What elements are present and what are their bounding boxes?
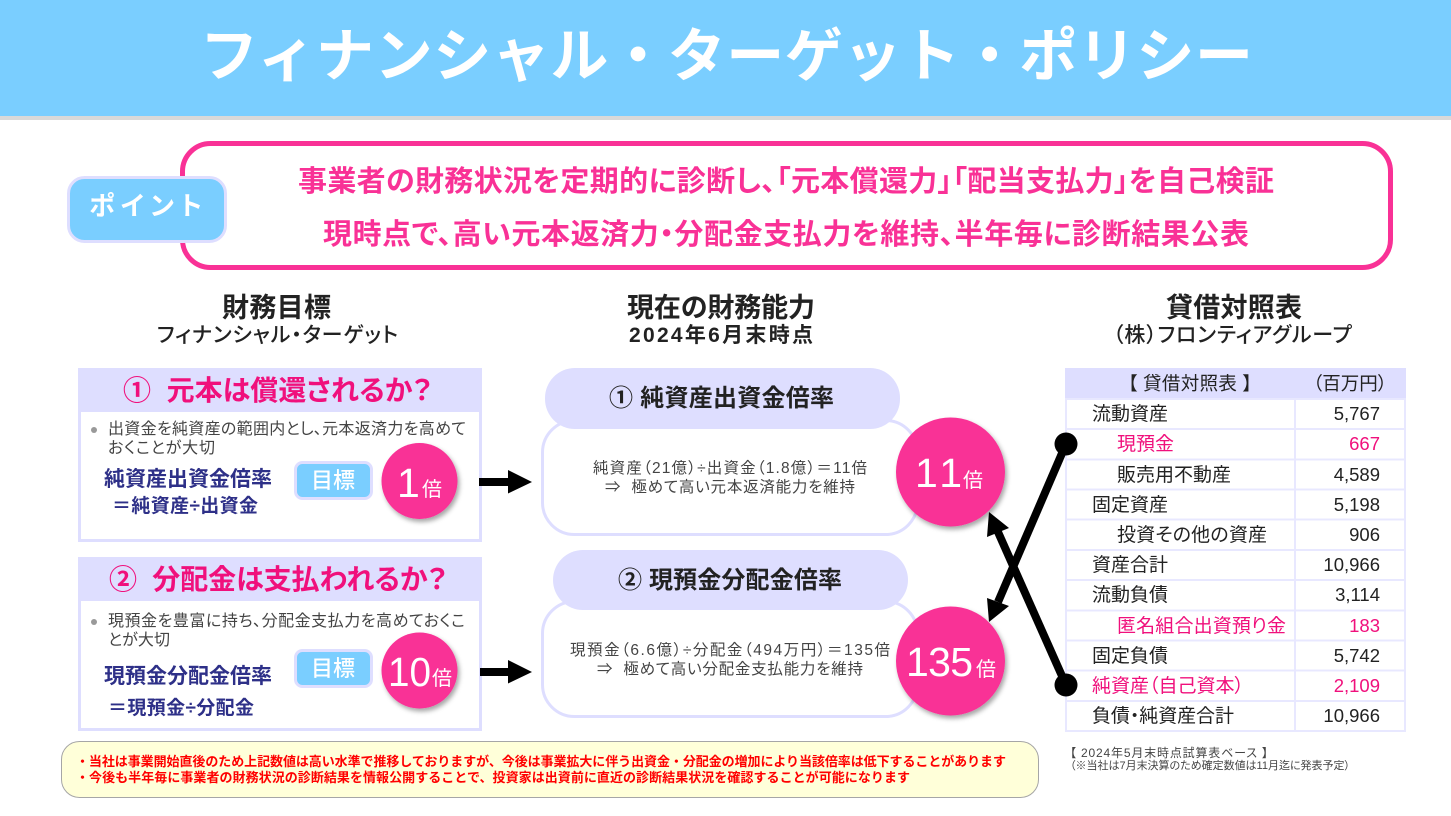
panel: current ratio 1: ⇒ 極めて高い元本返済能力を維持 [605,478,855,496]
panel: current ratio 1 [542,368,1005,534]
panel: current ratio 1: 純資産（21億）÷出資金（1.8億）＝11倍 [593,459,867,477]
balance sheet table: 5,742 [1334,645,1380,666]
panel: key point: ポイント [89,191,202,221]
panel: target 1: 倍 [422,478,442,501]
balance sheet table: 667 [1349,433,1380,454]
balance sheet table: 183 [1349,615,1380,636]
panel: target 2: 現預金分配金倍率 [104,665,272,688]
panel: target 2: 倍 [432,667,452,690]
panel: target 2: とが大切 [108,631,170,649]
panel: current ratio 2: 倍 [976,658,996,681]
panel: current ratio 2: 現預金（6.6億）÷分配金（494万円）＝135倍 [570,641,890,659]
arrow: net assets to 11x [987,512,1078,696]
heading: financial target: フィナンシャル・ターゲット [157,324,398,347]
panel: key point: 現時点で、高い元本返済力・分配金支払力を維持、半年毎に診断結果公表 [323,218,1249,251]
panel: target 1 [78,368,482,540]
heading: balance sheet: 貸借対照表 [1166,293,1302,323]
arrow: target 1 to current 1 [479,470,532,494]
heading: balance sheet: （株）フロンティアグループ [1113,324,1352,347]
balance sheet table: 固定資産 [1092,494,1168,516]
balance sheet table: （百万円） [1313,373,1387,394]
balance sheet table [1065,368,1406,731]
panel: target 1: ① 元本は償還されるか？ [123,375,432,406]
panel: key point: 事業者の財務状況を定期的に診断し、「元本償還力」「配当支払力」を自己検証 [298,165,1274,198]
panel: target 1: ＝純資産÷出資金 [112,495,258,517]
title banner: フィナンシャル・ターゲット・ポリシー [200,24,1253,89]
balance sheet table: 資産合計 [1092,554,1168,576]
callout: notes [62,742,1038,798]
panel: target 1: 純資産出資金倍率 [104,468,272,491]
balance sheet table: 906 [1349,524,1380,545]
heading: balance sheet [1113,293,1352,347]
balance sheet table: 負債・純資産合計 [1092,705,1234,727]
balance sheet table: 現預金 [1117,433,1174,455]
heading: financial target: 財務目標 [222,293,331,323]
panel: current ratio 1: 11 [915,450,962,496]
panel: target 2: 目標 [311,656,355,681]
balance sheet table: 5,198 [1334,494,1380,515]
balance sheet table: 5,767 [1334,403,1380,424]
panel: target 1: 出資金を純資産の範囲内とし、元本返済力を高めて [108,420,466,438]
heading: current capacity [627,293,815,347]
panel: current ratio 2: ⇒ 極めて高い分配金支払能力を維持 [597,660,863,678]
balance sheet table: 販売用不動産 [1117,464,1231,486]
callout: notes: ・今後も半年毎に事業者の財務状況の診断結果を情報公開することで、投資家は出資前に直近の診断結果状況を確認することが可能になります [76,770,910,785]
balance sheet table: 匿名組合出資預り金 [1117,615,1286,637]
balance sheet table: 【 貸借対照表 】 [1128,373,1252,394]
panel: current ratio 2 [542,550,1005,716]
panel: target 2: 現預金を豊富に持ち、分配金支払力を高めておくこ [108,612,465,630]
arrow: target 2 to current 2 [480,660,532,684]
panel: target 2: ＝現預金÷分配金 [108,697,254,719]
balance sheet footnote: 【 2024年5月末時点試算表ベース 】 [1070,745,1268,760]
panel: key point [68,144,1390,268]
balance sheet footnote: （※当社は7月末決算のため確定数値は11月迄に発表予定） [1070,758,1350,772]
panel: target 1: おくことが大切 [108,439,215,457]
balance sheet table: 2,109 [1334,675,1380,696]
panel: current ratio 2: 135 [906,639,973,685]
balance sheet table: 流動資産 [1092,403,1168,425]
panel: target 1: 1 [397,460,420,506]
balance sheet table: 10,966 [1323,554,1380,575]
heading: current capacity: 2024年6月末時点 [629,324,813,347]
balance sheet table: 固定負債 [1092,645,1168,667]
balance sheet table: 3,114 [1335,584,1380,605]
heading: financial target [157,293,398,347]
title banner [0,0,1451,120]
panel: target 2 [78,557,482,730]
panel: target 2: ② 分配金は支払われるか？ [109,564,447,595]
balance sheet table: 流動負債 [1092,584,1168,606]
panel: current ratio 1: ① 純資産出資金倍率 [609,385,834,412]
balance sheet table: 純資産（自己資本） [1092,675,1244,697]
panel: target 1: 目標 [311,468,355,493]
balance sheet table: 10,966 [1323,705,1380,726]
arrow: cash to 135x [987,432,1078,622]
panel: current ratio 1: 倍 [963,469,983,492]
panel: current ratio 2: ② 現預金分配金倍率 [618,567,842,594]
panel: target 2: 10 [388,649,431,695]
balance sheet footnote [1070,745,1350,772]
callout: notes: ・当社は事業開始直後のため上記数値は高い水準で推移しておりますが、今後は事業拡大に伴う出資金・分配金の増加により当該倍率は低下することがあります [76,754,1006,769]
balance sheet table: 4,589 [1334,464,1380,485]
balance sheet table: 投資その他の資産 [1117,524,1267,546]
heading: current capacity: 現在の財務能力 [627,293,815,323]
